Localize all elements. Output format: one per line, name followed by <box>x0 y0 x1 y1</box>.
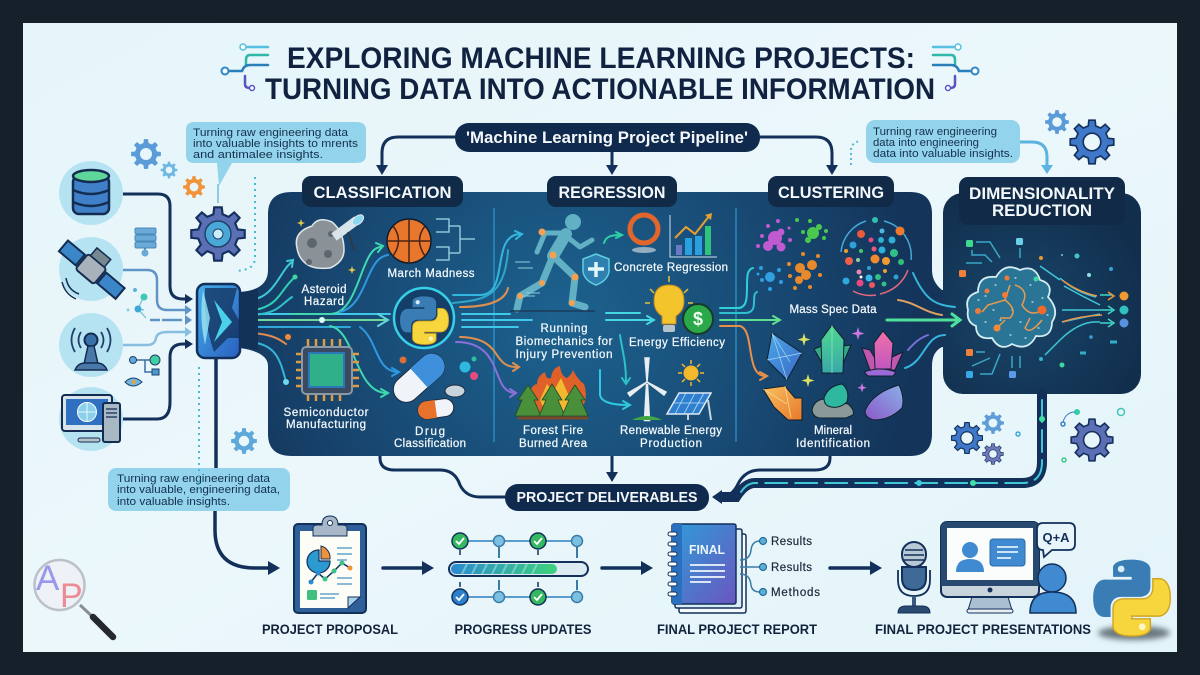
report outline: results and methods: Methods <box>771 587 820 599</box>
icon: network nodes <box>126 288 148 318</box>
icon: presentation monitor <box>941 522 1039 613</box>
icon: basketball and bracket <box>387 219 475 263</box>
heading: dimensionality reduction: DIMENSIONALITY <box>969 184 1116 203</box>
vertical line to proposal <box>215 358 272 568</box>
icon: python logo <box>1093 560 1170 640</box>
callout: bottom left: Turning raw engineering data <box>117 473 271 485</box>
label: running biomechanics: Biomechanics for <box>516 336 613 348</box>
title: EXPLORING MACHINE LEARNING PROJECTS: <box>287 42 915 75</box>
icon: AP magnifier logo: A <box>36 559 60 598</box>
icon: microphone <box>898 542 930 613</box>
icon: Q and A bubble <box>1037 523 1075 557</box>
arrow: right callout to dimensionality <box>851 141 1053 174</box>
label: forest fire: Forest Fire <box>523 425 583 437</box>
connector hub <box>197 284 258 358</box>
label: drug classification <box>394 426 466 450</box>
panel: dimensionality reduction <box>943 193 1141 394</box>
arrow: to deliverables <box>606 472 722 504</box>
lines to deliverables <box>380 456 830 497</box>
icon: sparkles pink <box>852 327 867 392</box>
title <box>265 42 935 106</box>
data stream flows <box>244 231 960 409</box>
callout: top right: data into valuable insights. <box>873 148 1013 160</box>
label: renewable energy: Production <box>640 438 702 450</box>
icon: drug capsules <box>388 348 478 420</box>
icon: progress updates <box>449 533 588 605</box>
label: energy efficiency: Energy Efficiency <box>629 337 725 349</box>
icon: runner <box>510 214 595 311</box>
icon: concrete ring and chart <box>630 213 717 257</box>
label: renewable energy <box>620 425 722 450</box>
label: semiconductor manufacturing: Manufacturing <box>286 419 366 431</box>
label: semiconductor manufacturing <box>284 407 369 431</box>
heading: classification: CLASSIFICATION <box>314 183 452 202</box>
heading: regression: REGRESSION <box>558 183 666 202</box>
callout: top right: data into engineering <box>873 137 979 149</box>
label: asteroid hazard: Hazard <box>304 296 344 308</box>
label: concrete regression: Concrete Regression <box>614 262 728 274</box>
icon: title circuit right <box>933 44 978 90</box>
icon: bulb and coin: $ <box>693 309 703 329</box>
label: running biomechanics <box>516 323 613 361</box>
icon: antenna <box>59 313 123 377</box>
icon: gears left <box>131 139 257 454</box>
label: running biomechanics: Running <box>540 323 588 335</box>
icon: database <box>59 161 123 225</box>
icon: bulb and coin <box>645 276 713 334</box>
label: project proposal: PROJECT PROPOSAL <box>262 622 398 637</box>
icon: sparkles <box>798 333 814 387</box>
dotted trails <box>199 177 255 490</box>
icon: mineral crystals <box>763 325 903 420</box>
icon: brain <box>967 267 1055 347</box>
label: asteroid hazard: Asteroid <box>302 284 346 296</box>
label: march madness: March Madness <box>388 268 475 280</box>
icon: small server <box>135 228 156 256</box>
label: semiconductor manufacturing: Semiconductor <box>284 407 369 419</box>
icon: wind turbine and solar <box>628 358 711 420</box>
label: final project report: FINAL PROJECT REPORT <box>657 622 818 637</box>
icon: semiconductor chip <box>296 339 359 401</box>
callout: top left <box>186 122 366 203</box>
icon: eye and flow nodes <box>125 355 160 386</box>
icon: final report book <box>668 524 746 613</box>
heading: clustering <box>768 176 894 207</box>
callout: bottom left <box>108 468 290 511</box>
icon: AP magnifier logo <box>34 559 113 637</box>
label: progress updates: PROGRESS UPDATES <box>454 622 592 637</box>
arrow: to project proposal <box>268 561 280 575</box>
label: drug classification: Classification <box>394 438 466 450</box>
heading: classification <box>302 176 463 207</box>
callout: top left: into valuable insights to mrents <box>193 138 358 150</box>
icon: project proposal clipboard <box>294 516 366 613</box>
icon: audience person <box>1030 564 1076 613</box>
callout: top right: Turning raw engineering <box>873 126 997 138</box>
report outline: results and methods: Results <box>771 536 812 548</box>
label: final project presentations: FINAL PROJECT PRESENTATIONS <box>875 622 1091 637</box>
label: mineral identification: Identification <box>796 438 870 450</box>
icon: satellite <box>57 231 133 301</box>
icon: computer <box>59 387 123 451</box>
heading: dimensionality reduction: REDUCTION <box>992 201 1092 220</box>
icon: forest fire <box>515 366 588 418</box>
label: forest fire: Burned Area <box>519 438 588 450</box>
panel: main algorithms <box>240 192 944 456</box>
icon: mass spec clusters <box>756 218 828 291</box>
icon: asteroid with telescope <box>296 213 366 274</box>
heading: regression <box>547 176 677 207</box>
label: asteroid hazard <box>302 284 346 308</box>
label: mass spec data: Mass Spec Data <box>790 304 877 316</box>
icon: final report book: FINAL <box>689 542 725 557</box>
label: renewable energy: Renewable Energy <box>620 425 722 437</box>
pipe from dimensionality reduction <box>722 394 1045 497</box>
heading: project deliverables <box>505 484 709 511</box>
icon: gears right <box>952 110 1124 464</box>
heading: clustering: CLUSTERING <box>778 183 884 202</box>
icon: AP magnifier logo: P <box>60 577 83 615</box>
icon: Q and A bubble: Q+A <box>1042 530 1070 545</box>
title: TURNING DATA INTO ACTIONABLE INFORMATION <box>265 73 935 106</box>
callout: top left: and antimalee insights. <box>193 149 323 161</box>
report outline: results and methods <box>740 536 820 599</box>
callout: bottom left: into valuable, engineering data, <box>117 484 280 496</box>
label: mineral identification <box>796 425 870 450</box>
icon: particle cluster circle <box>841 217 911 295</box>
label: forest fire <box>519 425 588 450</box>
heading: project deliverables: PROJECT DELIVERABLES <box>516 489 698 506</box>
label: running biomechanics: Injury Prevention <box>516 349 612 361</box>
label: drug classification: Drug <box>415 426 445 438</box>
icon: shield <box>583 254 609 285</box>
arrow: updates to report <box>602 561 653 575</box>
icon: title circuit left <box>222 44 268 90</box>
pipeline heading and arrows: 'Machine Learning Project Pipeline' <box>466 129 748 147</box>
pipeline heading and arrows <box>376 123 838 175</box>
icon: dimensionality inputs and outputs <box>959 238 1128 378</box>
callout: top right <box>866 120 1020 163</box>
input arrows <box>123 194 193 419</box>
icon: python center <box>394 288 454 348</box>
label: mineral identification: Mineral <box>814 425 852 437</box>
report outline: results and methods: Results <box>771 562 812 574</box>
arrow: report to presentations <box>830 561 882 575</box>
icon: main gear <box>191 207 245 261</box>
dividers <box>494 208 736 442</box>
callout: bottom left: into valuable insights. <box>117 496 230 508</box>
arrow: proposal to updates <box>383 561 434 575</box>
heading: dimensionality reduction <box>959 177 1125 225</box>
callout: top left: Turning raw engineering data <box>193 127 349 139</box>
